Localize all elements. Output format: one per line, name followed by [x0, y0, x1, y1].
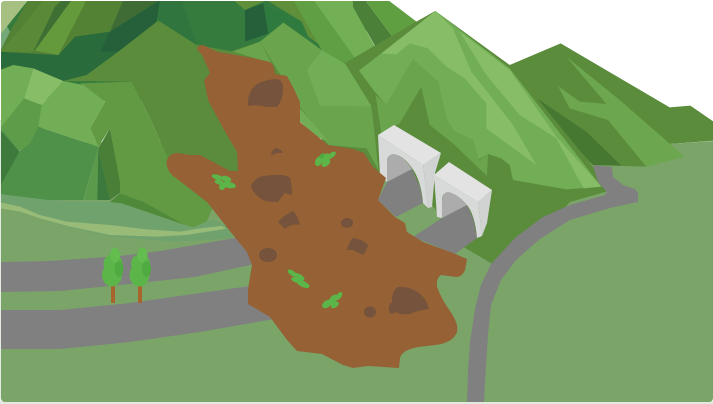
lowland strip — [0, 194, 233, 242]
central dark hill — [64, 20, 238, 171]
tree 1 — [102, 248, 124, 303]
tree 2 — [130, 248, 151, 303]
dark mud patches — [248, 79, 429, 318]
bush 4 — [322, 292, 342, 308]
road: upper left — [1, 238, 255, 292]
back ridge: olive slopes — [0, 0, 267, 55]
left foreground hills — [1, 65, 168, 200]
bush 3 — [288, 270, 310, 288]
road: right curve — [467, 165, 638, 403]
center peak mountain — [353, 11, 606, 263]
tunnel 1 — [378, 125, 441, 217]
road: lower left — [1, 286, 280, 349]
tunnel 2 — [413, 162, 492, 254]
back ridge: dark forest band — [0, 0, 367, 100]
lower hill foot — [110, 180, 212, 228]
bush 1 — [314, 152, 336, 167]
left mid hill — [230, 23, 387, 177]
upper right green slopes — [267, 0, 435, 75]
ground — [1, 141, 713, 402]
pale ground between tunnels — [416, 200, 442, 222]
far right mountain — [486, 43, 713, 167]
landslide debris flow — [167, 45, 467, 368]
pale path band — [0, 202, 227, 237]
bush 2 — [211, 173, 236, 190]
